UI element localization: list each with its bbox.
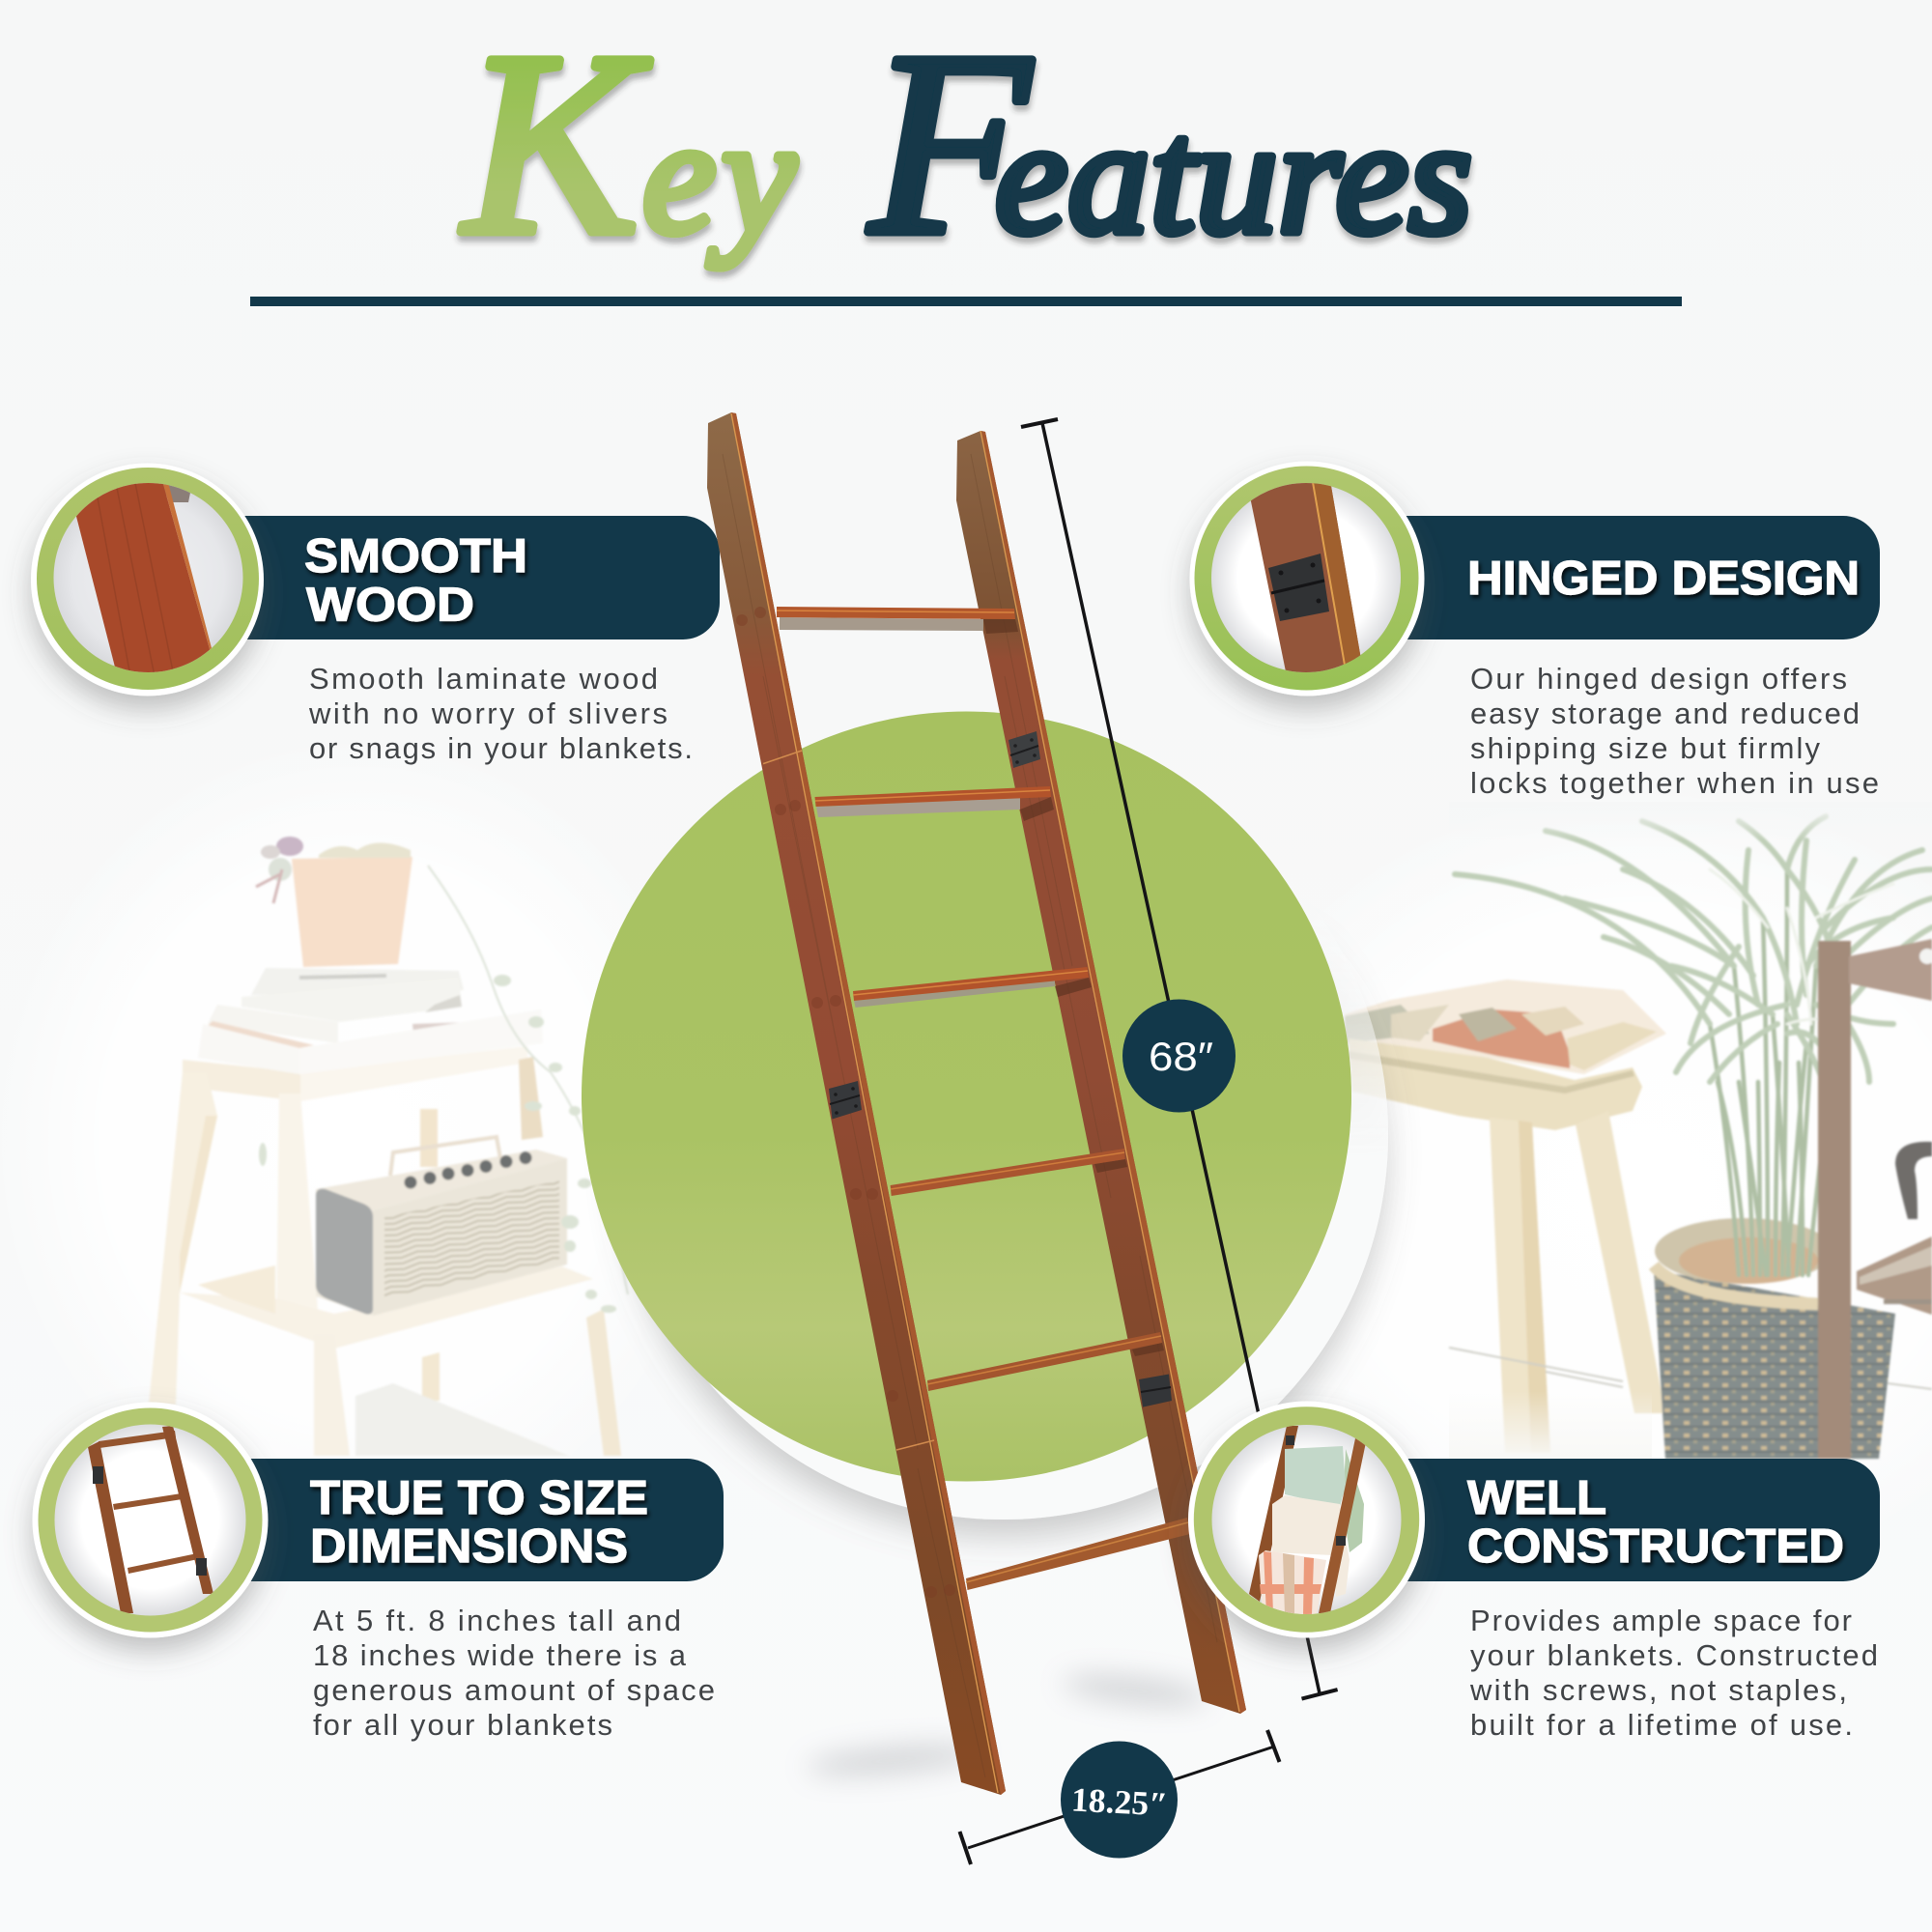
body text: hinged design: locks together when in use	[1470, 766, 1879, 800]
hinge mid left	[829, 1081, 862, 1119]
title: F	[866, 0, 1034, 289]
left rail	[707, 412, 1006, 1795]
green centre circle	[582, 711, 1351, 1482]
title: eatures	[995, 86, 1472, 268]
rung 4	[891, 1149, 1125, 1196]
rung 1	[777, 607, 1015, 631]
icon circle: hinged design	[1190, 462, 1424, 696]
body text: hinged design: easy storage and reduced	[1470, 696, 1860, 730]
icon circle: well constructed	[1188, 1401, 1425, 1638]
body text: true to size dimensions	[313, 1604, 715, 1742]
rung 3	[853, 967, 1089, 1008]
heading: well constructed: WELL	[1467, 1472, 1606, 1524]
faded photo: bench, potted plant and chair	[1345, 816, 1932, 1459]
badge: 18.25 inches	[1061, 1741, 1178, 1859]
white offset circle	[618, 750, 1388, 1520]
fade of photo above the plant	[1449, 802, 1932, 840]
icon circle: smooth wood	[31, 464, 264, 696]
body text: well constructed: Provides ample space for	[1470, 1604, 1852, 1637]
panel bar: hinged design	[1352, 516, 1880, 639]
body text: well constructed	[1469, 1604, 1878, 1742]
panel bar: well constructed	[1352, 1459, 1880, 1581]
title: K	[460, 0, 653, 289]
heading: true to size dimensions	[310, 1472, 648, 1573]
body text: smooth wood: or snags in your blankets.	[309, 731, 693, 765]
body text: true to size dimensions: for all your blankets	[313, 1708, 612, 1742]
body text: smooth wood	[308, 662, 693, 765]
body text: smooth wood: Smooth laminate wood	[309, 662, 658, 696]
title: ey	[642, 85, 802, 269]
heading: smooth wood: WOOD	[306, 580, 474, 632]
body text: hinged design	[1470, 662, 1879, 800]
ladder floor shadows	[806, 1670, 1208, 1780]
heading: true to size dimensions: DIMENSIONS	[310, 1520, 628, 1573]
body text: true to size dimensions: generous amount of space	[313, 1673, 715, 1707]
hinge lower right	[1139, 1374, 1172, 1407]
heading: well constructed	[1467, 1472, 1844, 1573]
body text: true to size dimensions: At 5 ft. 8 inches tall and	[313, 1604, 681, 1637]
faded photo: stool with plant and radio	[149, 837, 628, 1456]
heading: smooth wood	[304, 530, 527, 632]
badge: 68 inches	[1122, 999, 1236, 1113]
fade of bench legs near the floor	[1449, 1391, 1652, 1461]
body text: well constructed: built for a lifetime of use.	[1470, 1708, 1853, 1742]
icon circle: ladder dimensions	[33, 1403, 269, 1638]
rung 5	[927, 1332, 1162, 1391]
badge: 18.25 inches: 18.25″	[1070, 1780, 1169, 1824]
hinge upper right	[1009, 731, 1040, 768]
right rail	[956, 431, 1246, 1714]
body text: smooth wood: with no worry of slivers	[308, 696, 668, 730]
heading: smooth wood: SMOOTH	[304, 530, 527, 582]
body text: true to size dimensions: 18 inches wide there is a	[313, 1638, 687, 1672]
body text: hinged design: shipping size but firmly	[1470, 731, 1820, 765]
heading: well constructed: CONSTRUCTED	[1467, 1520, 1844, 1573]
heading: true to size dimensions: TRUE TO SIZE	[310, 1472, 648, 1524]
rung 2	[815, 786, 1051, 817]
title underline	[250, 297, 1682, 306]
body text: well constructed: with screws, not staples,	[1469, 1673, 1847, 1707]
product ladder	[707, 412, 1246, 1795]
soft white wash behind photos	[0, 734, 1932, 1594]
body text: hinged design: Our hinged design offers	[1470, 662, 1847, 696]
badge: 68 inches: 68″	[1149, 1034, 1213, 1079]
title	[460, 0, 1472, 289]
heading: hinged design: HINGED DESIGN	[1467, 553, 1860, 605]
panel bar: true to size	[203, 1459, 724, 1581]
panel bar: smooth wood	[193, 516, 720, 639]
width dimension line	[960, 1730, 1279, 1864]
rung 6	[966, 1518, 1190, 1590]
body text: well constructed: your blankets. Constructed	[1470, 1638, 1878, 1672]
height dimension line	[1021, 419, 1338, 1698]
